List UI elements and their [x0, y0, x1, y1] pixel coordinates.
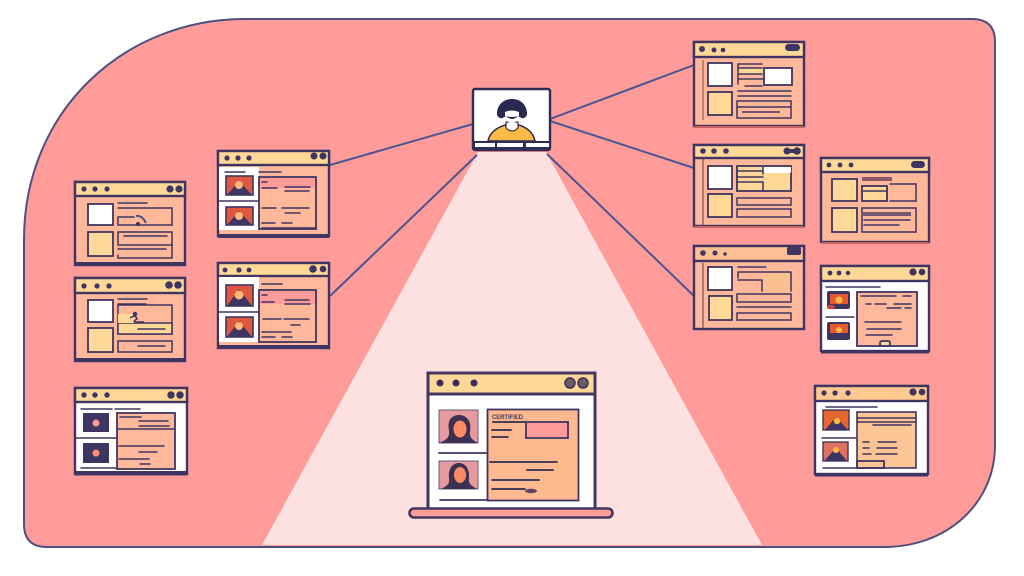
certificate panel	[488, 410, 578, 500]
window: left top	[75, 182, 185, 266]
thumbnail	[226, 317, 253, 337]
window: right second	[694, 145, 804, 228]
window: left bottom	[75, 388, 187, 476]
main laptop window	[428, 373, 595, 509]
thumbnail	[226, 176, 253, 195]
window: right third	[694, 246, 804, 329]
thumbnail	[823, 410, 849, 430]
window: upper left connected	[218, 151, 329, 238]
window: far right middle	[821, 266, 929, 354]
window: right top	[694, 42, 804, 128]
thumbnail	[83, 443, 109, 463]
presenter monitor	[473, 89, 550, 150]
window: lower left connected	[218, 263, 329, 349]
photo: person two	[439, 461, 478, 489]
window: far right bottom	[815, 386, 928, 476]
thumbnail	[226, 207, 253, 225]
thumbnail	[226, 285, 253, 306]
thumbnail	[827, 291, 850, 309]
spotlight cone	[262, 152, 762, 545]
connector lines	[330, 65, 694, 296]
window: far right top	[821, 158, 929, 244]
window: left middle	[75, 278, 185, 362]
laptop base	[410, 508, 612, 518]
photo: person one	[439, 410, 478, 443]
certificate heading: CERTIFIED	[492, 414, 523, 421]
thumbnail	[83, 413, 109, 432]
thumbnail	[823, 442, 848, 461]
icon: presenter	[488, 99, 535, 141]
thumbnail	[827, 322, 850, 340]
